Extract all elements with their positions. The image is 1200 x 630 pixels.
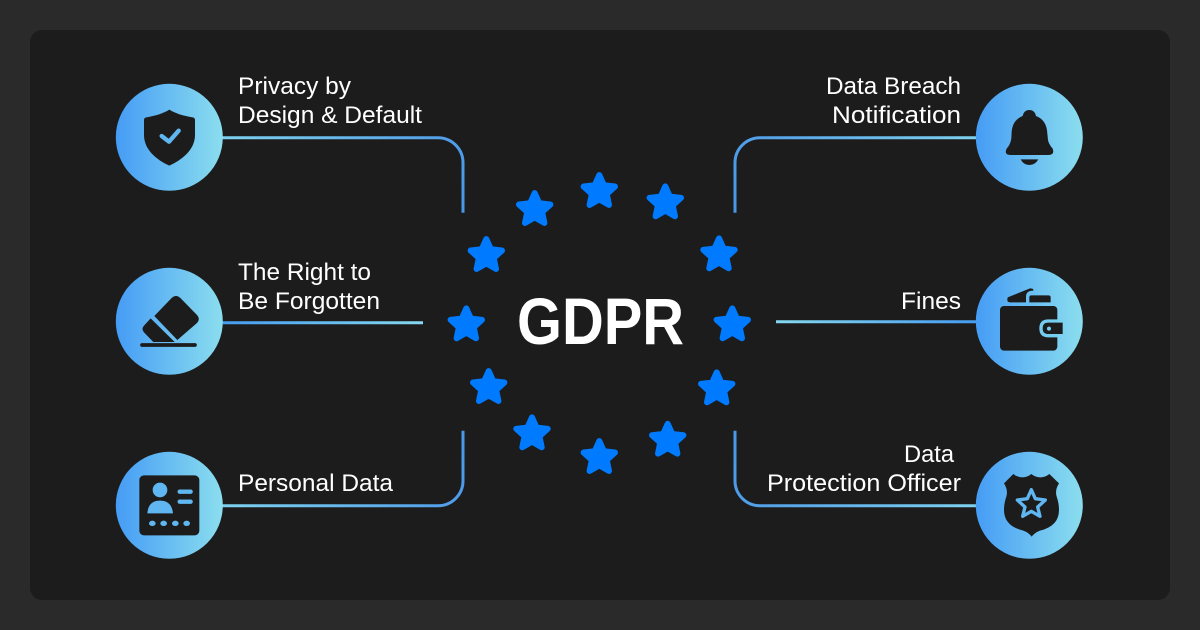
label: data breach notification: Data Breach bbox=[826, 73, 961, 100]
label: data protection officer: Protection Officer bbox=[767, 470, 961, 497]
icon: shield with check bbox=[116, 84, 223, 191]
label: data protection officer: Data bbox=[904, 441, 955, 468]
label: fines: Fines bbox=[901, 288, 961, 315]
icon: bell bbox=[976, 84, 1083, 191]
title: GDPR: GDPR bbox=[517, 284, 684, 358]
connector: privacy by design bbox=[222, 138, 463, 213]
icon: id card bbox=[116, 452, 223, 559]
label: privacy by design and default: Design & Default bbox=[238, 102, 422, 129]
label: privacy by design and default bbox=[238, 73, 422, 129]
connector: right to be forgotten bbox=[222, 321, 423, 324]
connector: fines bbox=[776, 320, 977, 323]
label: the right to be forgotten: Be Forgotten bbox=[238, 288, 380, 315]
label: the right to be forgotten bbox=[238, 259, 380, 315]
label: data protection officer bbox=[767, 441, 961, 497]
label: personal data: Personal Data bbox=[238, 470, 394, 497]
icon: eraser bbox=[116, 268, 223, 375]
label: data breach notification bbox=[826, 73, 961, 129]
connector: data protection officer bbox=[735, 431, 977, 506]
icon: wallet bbox=[976, 268, 1083, 375]
icon: officer badge bbox=[976, 452, 1083, 559]
label: the right to be forgotten: The Right to bbox=[238, 259, 371, 286]
label: data breach notification: Notification bbox=[832, 102, 961, 129]
connector: data breach notification bbox=[735, 138, 977, 213]
label: privacy by design and default: Privacy by bbox=[238, 73, 351, 100]
connector: personal data bbox=[222, 431, 463, 506]
ring of twelve stars bbox=[451, 175, 748, 471]
